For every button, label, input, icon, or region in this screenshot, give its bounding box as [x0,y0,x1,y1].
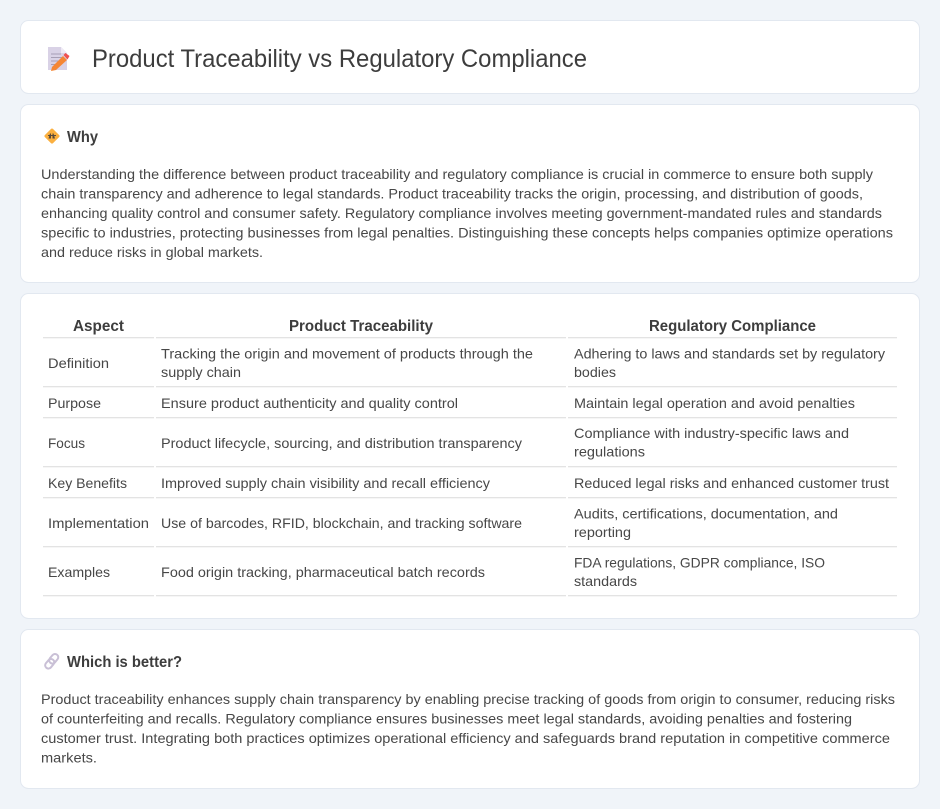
icon: document with pencil [48,47,70,71]
row: examples [43,554,897,596]
icon: warning diamond [44,128,60,144]
panel: comparison table [20,294,920,618]
row: implementation: Implementation [48,515,149,531]
text block: which is better paragraph [41,691,895,766]
text block: why paragraph: chain transparency and adherence to legal standards. Product traceability tracks the origin, processing, and distribution of goods, [41,186,863,202]
row: purpose [43,395,897,418]
table header row: Product Traceability [289,318,433,335]
row: key benefits: Reduced legal risks and enhanced customer trust [574,475,889,491]
text block: which is better paragraph: customer trust. Integrating both practices optimizes operational efficiency and safeguards brand reputation in competitive commerce [41,730,890,746]
row: definition: Definition [48,355,109,371]
row: focus: regulations [574,444,645,460]
table header row: Regulatory Compliance [649,318,816,335]
row: examples: FDA regulations, GDPR compliance, ISO [574,554,825,570]
row: key benefits [43,475,897,498]
panel: header [20,20,920,94]
row: definition: Tracking the origin and movement of products through the [161,346,533,362]
text block: which is better paragraph: Product traceability enhances supply chain transparency by enabling precise tracking of goods from origin to consumer, reducing risks [41,691,895,707]
row: purpose: Purpose [48,395,101,411]
row: focus [43,425,897,467]
row: purpose: Maintain legal operation and avoid penalties [574,395,855,411]
row: definition: Adhering to laws and standards set by regulatory [574,346,885,362]
row: implementation [43,506,897,547]
panel: why [20,104,920,282]
text block: why paragraph: Understanding the difference between product traceability and regulatory compliance is crucial in commerce to ensure both supply [41,166,873,182]
row: implementation: Audits, certifications, documentation, and [574,506,838,522]
row: examples: Food origin tracking, pharmaceutical batch records [161,564,485,580]
heading: which is better: Which is better? [67,654,182,671]
table header row: Aspect [73,318,125,335]
text block: which is better paragraph: markets. [41,750,97,766]
text block: why paragraph: specific to industries, protecting businesses from legal penalties. Distinguishing these concepts helps companies optimize operations [41,224,893,240]
row: focus: Focus [48,435,85,451]
text block: why paragraph: and reduce risks in global markets. [41,244,263,260]
text block: why paragraph: enhancing quality control and consumer safety. Regulatory compliance involves meeting government-mandated rules and standards [41,205,882,221]
row: examples: Examples [48,564,110,580]
text block: why paragraph [41,166,893,260]
icon: link [44,653,60,670]
panel: which is better [20,630,920,788]
row: definition [43,346,897,387]
title: Product Traceability vs Regulatory Compliance [92,45,587,73]
row: focus: Product lifecycle, sourcing, and distribution transparency [161,435,522,451]
row: key benefits: Key Benefits [48,475,127,491]
row: definition: supply chain [161,364,241,380]
text block: which is better paragraph: of counterfeiting and recalls. Regulatory compliance ensures businesses meet legal standards, avoiding penalties and fostering [41,710,852,726]
row: focus: Compliance with industry-specific laws and [574,425,849,441]
row: key benefits: Improved supply chain visibility and recall efficiency [161,475,490,491]
row: purpose: Ensure product authenticity and quality control [161,395,458,411]
row: implementation: Use of barcodes, RFID, blockchain, and tracking software [161,515,522,531]
row: definition: bodies [574,364,616,380]
heading: why: Why [67,129,98,146]
table header row [43,318,897,338]
row: examples: standards [574,573,637,589]
row: implementation: reporting [574,524,631,540]
